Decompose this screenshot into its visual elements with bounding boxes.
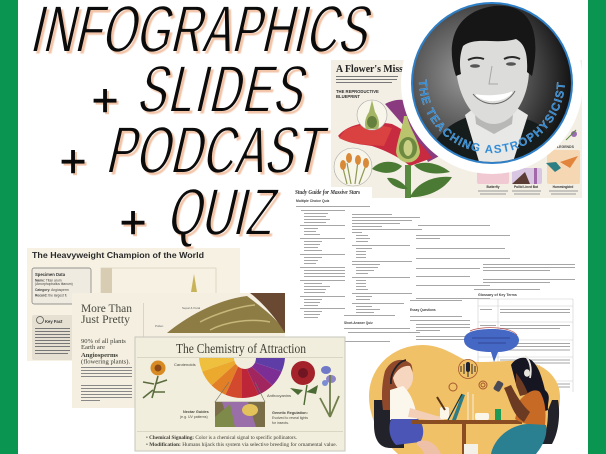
microphone icon (458, 360, 478, 378)
slide: more than just pretty (72, 293, 285, 408)
essay heading: Essay Questions (410, 308, 436, 312)
pollinator captions: Pallid Lined Bat (514, 185, 539, 189)
statistic text: (flowering plants). (81, 358, 130, 366)
slide: heavyweight champion (27, 248, 240, 361)
statistic text: 90% of all plants (81, 338, 126, 345)
blueprint label: THE REPRODUCTIVE (336, 89, 379, 94)
presenter portrait badge (401, 2, 582, 174)
specimen image frame (101, 268, 216, 298)
petal colour fan (199, 358, 285, 398)
badge curved text: THE TEACHING ASTROPHYSICIST (418, 80, 565, 154)
slide heading (81, 301, 132, 326)
yellow blob background (369, 345, 560, 454)
slide heading: Just Pretty (81, 312, 130, 326)
statistic text: Earth are (81, 344, 105, 351)
glossary table: Glossary of Key Terms (478, 293, 517, 297)
inset: stamen diagram (334, 148, 372, 186)
panel: study guide quiz (292, 186, 585, 392)
flower pistil (396, 116, 420, 162)
specimen data box: Record: the largest fl. (35, 294, 67, 298)
slide heading: The Heavyweight Champion of the World (32, 251, 204, 260)
genetic regulation label: Evolved to reveal lights (272, 416, 308, 420)
slide heading: More Than (81, 301, 132, 315)
green left border (0, 0, 18, 454)
specimen data box (32, 268, 91, 304)
title line: slides: SLIDES (132, 52, 317, 127)
multiple choice heading: Multiple Choice Quiz (296, 199, 330, 203)
genetic regulation label (272, 411, 308, 425)
green right border (588, 0, 606, 454)
portrait figure (436, 6, 550, 162)
nectar guides label: (e.g. UV patterns) (180, 415, 208, 419)
pollinator captions: Hummingbird (553, 185, 573, 189)
anthocyanins label: Anthocyanins (267, 393, 291, 398)
speech bubble (464, 328, 519, 362)
key fact box: Key Fact (45, 319, 63, 324)
flower leaves and stem (372, 162, 452, 198)
petal illustration (167, 293, 285, 333)
body text (81, 368, 132, 400)
panel: podcast illustration (369, 328, 560, 454)
short answer heading: Short-Answer Quiz (344, 321, 373, 325)
small round icons (449, 381, 487, 391)
quiz body lines (296, 206, 370, 318)
genetic regulation label: Genetic Regulation: (272, 411, 308, 415)
specimen data box: Name: Titan arum (35, 278, 62, 282)
petal labels (155, 306, 201, 328)
study guide heading: Study Guide for Massive Stars (295, 189, 360, 196)
statistic text: Angiosperms (81, 352, 118, 359)
flower heading: A Flower's Miss (336, 64, 403, 75)
woman left (382, 360, 449, 454)
plus sign: podcast: + (60, 135, 86, 187)
flower intro text (336, 76, 398, 82)
inset: pistil diagram (357, 100, 387, 130)
bullet points (146, 434, 337, 448)
plus sign: quiz: + (120, 196, 146, 248)
rose illustration (290, 361, 318, 405)
petal labels: Sepal & Petal (182, 306, 201, 310)
nectar guides label (180, 410, 209, 419)
bullet points: • Modification: Humans hijack this system via selective breeding for ornamental value. (146, 441, 337, 448)
short answer section (344, 300, 462, 316)
table with tablet and cups (412, 392, 522, 454)
glossary table (478, 293, 573, 392)
genetic regulation label: for insects. (272, 421, 289, 425)
slide heading: The Chemistry of Attraction (176, 341, 306, 356)
title line: podcast: PODCAST (101, 113, 334, 188)
bullet points: • Chemical Signaling: Color is a chemical signal to specific pollinators. (146, 434, 297, 441)
blueprint label (336, 89, 379, 99)
pollinator captions (478, 185, 578, 194)
title line: quiz: QUIZ (162, 175, 285, 250)
key fact box (32, 315, 75, 360)
bluebell illustration (320, 366, 339, 417)
specimen data box: Category: Angiosperm (35, 288, 69, 292)
specimen data box: (Amorphophallus titanum) (35, 282, 73, 286)
pollinator cards (477, 130, 580, 184)
blueprint label: BLUEPRINT (336, 94, 360, 99)
marigold illustration (143, 360, 167, 398)
woman right (491, 356, 549, 454)
plus sign: slides: + (92, 74, 118, 126)
nectar guides label: Nectar Guides (183, 410, 209, 414)
statistic text (81, 338, 130, 366)
flower petals (338, 100, 447, 166)
panel: flower mission infographic (331, 60, 582, 198)
pollinator captions: Butterfly (486, 185, 500, 189)
inset: nectar guides photo (215, 382, 265, 427)
title (25, 0, 380, 250)
pollinator cards: LEGENDS (557, 145, 575, 149)
chairs (374, 400, 559, 448)
slide: chemistry of attraction (135, 337, 345, 451)
specimen data box: Specimen Data (35, 272, 66, 277)
petal labels: Pollen (155, 324, 164, 328)
carotenoids label: Carotenoids (174, 362, 196, 367)
